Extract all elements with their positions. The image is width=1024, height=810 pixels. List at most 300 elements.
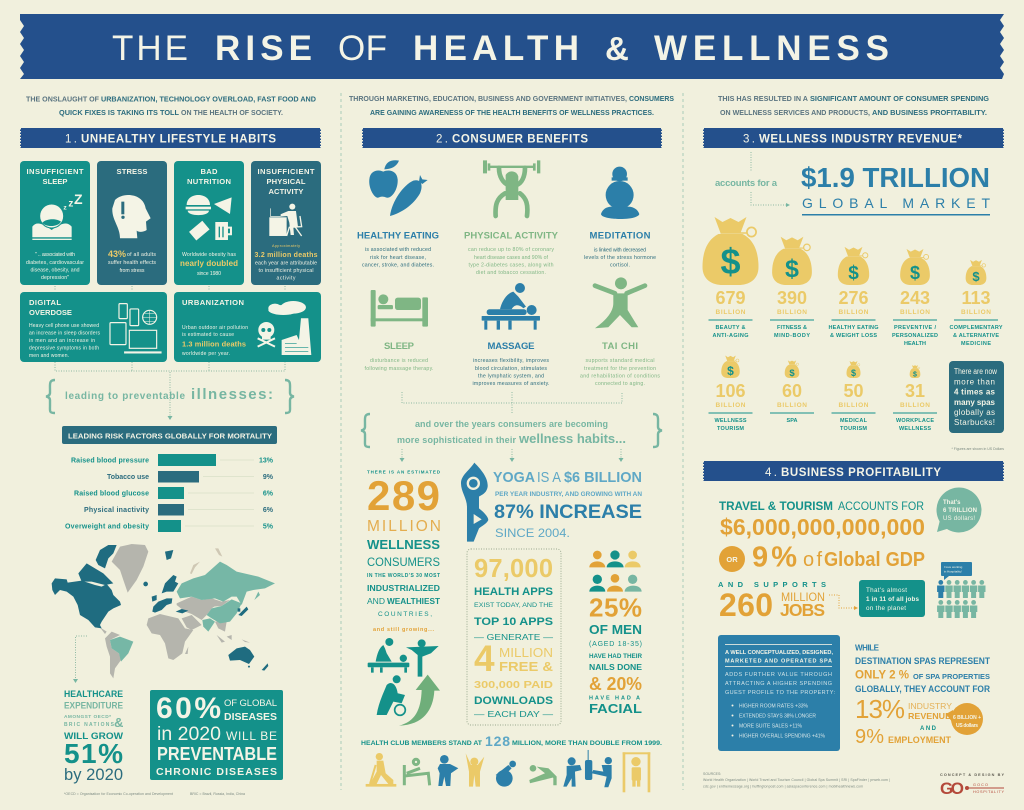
title banner: & — [605, 30, 629, 67]
footnote: OECD and BRIC: *OECD = Organisation for Economic Co-operation and Development — [64, 792, 173, 796]
card: stress — [97, 161, 167, 285]
card: digital overdose: depressive symptoms in both — [29, 346, 99, 352]
block: destination spas: AND — [920, 726, 937, 732]
revenue item: medical tourism — [832, 361, 876, 432]
intro: column 1: ON THE HEALTH OF SOCIETY. — [181, 108, 283, 117]
intro: column 3: AND BUSINESS PROFITABILITY. — [872, 108, 987, 117]
benefit: massage: increases flexibility, improves — [473, 358, 549, 364]
benefit: tai chi: and rehabilitation of conditions — [580, 374, 660, 380]
block: yoga: SINCE 2004. — [495, 526, 570, 540]
health club members line: MILLION, MORE THAN DOUBLE FROM 1999. — [512, 740, 662, 747]
healthcare expenditure text: AMONGST OECD* — [64, 714, 111, 720]
revenue item: complementary and alternative medicine: & ALTERNATIVE — [953, 333, 999, 339]
block: 260 million jobs: JOBS — [780, 600, 825, 620]
revenue item: complementary and alternative medicine: MEDICINE — [961, 341, 991, 347]
health club members line — [361, 733, 662, 749]
icon: sleeping head on book — [32, 191, 83, 240]
benefit: massage — [472, 283, 550, 387]
card: bad nutrition: Worldwide obesity has — [182, 252, 236, 258]
section heading 3: 3. — [743, 134, 755, 146]
world map — [52, 544, 275, 678]
revenue item: beauty and anti-aging: ANTI-AGING — [712, 333, 748, 339]
card: insufficient physical activity: ACTIVITY — [268, 187, 304, 196]
icons: gym exercise row — [366, 750, 650, 792]
block: yoga: PER YEAR INDUSTRY, AND GROWING WITH AN — [495, 492, 642, 498]
panel: well conceptualized spa: A WELL CONCEPTUALIZED, DESIGNED, — [725, 650, 833, 656]
revenue item: preventive and personalized health — [892, 249, 938, 347]
arrow: map to healthcare text — [73, 636, 87, 683]
logo: GOCO Hospitality: CONCEPT & DESIGN BY — [940, 773, 1004, 777]
benefit: tai chi: TAI CHI — [602, 341, 638, 352]
block: health apps: — GENERATE — — [474, 633, 553, 642]
block: men grooming stats — [589, 593, 643, 716]
sources — [703, 772, 890, 788]
icon: phones, tablet, laptop, globe — [110, 304, 161, 353]
block: 289 million consumers: WELLNESS — [367, 537, 440, 552]
icon: sleeping head on book: z — [68, 199, 73, 210]
revenue item: workplace wellness: $ — [913, 372, 917, 378]
benefit: physical activity: type 2-diabetes cases, along with — [468, 262, 554, 268]
revenue item: medical tourism: 50 — [843, 381, 864, 401]
revenue item: spa: $ — [789, 368, 795, 379]
benefit: sleep: following massage therapy. — [364, 366, 434, 372]
panel: well conceptualized spa: HIGHER OVERALL SPENDING +41% — [739, 734, 826, 740]
revenue item: wellness tourism: 106 — [715, 381, 746, 401]
card: digital overdose: OVERDOSE — [29, 308, 72, 317]
revenue item: fitness and mind-body — [770, 237, 814, 339]
card: insufficient physical activity: activity — [276, 276, 296, 282]
health club members line: 128 — [485, 733, 510, 749]
revenue item: beauty and anti-aging — [702, 217, 758, 339]
block: 260 million jobs — [718, 580, 826, 623]
heading: leading risk factors: LEADING RISK FACTORS GLOBALLY FOR MORTALITY — [68, 432, 272, 440]
badge: 6 billion: 6 BILLION + — [953, 715, 981, 721]
block: health apps: MILLION — [499, 645, 553, 660]
revenue item: medical tourism: MEDICAL — [840, 418, 868, 424]
heading: wellness habits: wellness habits... — [518, 431, 626, 446]
block: men grooming stats: HAVE HAD THEIR — [589, 654, 643, 660]
card: stress: suffer health effects — [108, 260, 156, 266]
panel: well conceptualized spa: GUEST PROFILE TO THE PROPERTY: — [725, 690, 835, 696]
heading: wellness habits — [397, 419, 626, 446]
card: urbanization: URBANIZATION — [182, 298, 244, 307]
block: destination spas: GLOBALLY, THEY ACCOUNT FOR — [855, 684, 990, 694]
sources: SOURCES: — [703, 772, 721, 776]
benefit: tai chi: treatment for the prevention — [584, 366, 656, 372]
panel: well conceptualized spa: HIGHER ROOM RATES +33% — [739, 704, 809, 710]
section heading 2: 2. — [436, 134, 448, 146]
panel: well conceptualized spa: ADDS FURTHER VALUE THROUGH — [725, 672, 832, 678]
section heading 2: CONSUMER BENEFITS — [452, 134, 588, 146]
revenue item: spa — [770, 360, 814, 424]
right brace — [653, 414, 662, 447]
intro: column 3 — [718, 94, 989, 117]
card: insufficient physical activity: each year are attributable — [255, 260, 317, 266]
benefit: healthy eating: HEALTHY EATING — [357, 231, 439, 242]
badge: or — [719, 546, 745, 572]
block: yoga: YOGA — [493, 469, 535, 486]
intro: column 2 — [349, 94, 674, 117]
badge: 6 billion — [946, 703, 983, 735]
icon: massage table — [482, 283, 540, 330]
title banner: WELLNESS — [654, 29, 889, 68]
icons: massage, stretch, exercise bike, growth arrow — [368, 638, 440, 726]
callout: 60% of global diseases: PREVENTABLE — [157, 744, 277, 764]
healthcare expenditure text: BRIC NATIONS — [64, 722, 115, 728]
block: men grooming stats: NAILS DONE — [589, 663, 643, 672]
block: travel and tourism: ACCOUNTS FOR — [838, 499, 924, 513]
block: health apps: TOP 10 APPS — [474, 616, 553, 628]
benefit: sleep — [364, 290, 434, 372]
card: insufficient physical activity: 3.2 million deaths — [254, 252, 318, 259]
revenue item: preventive and personalized health: BILLION — [900, 309, 930, 316]
block: men grooming stats: 25% — [589, 593, 642, 623]
footnote: OECD and BRIC — [64, 792, 245, 796]
badge: or: OR — [726, 555, 738, 564]
logo: GOCO Hospitality — [940, 773, 1004, 798]
bar chart: risk factors: Raised blood pressure — [71, 458, 149, 464]
block: health apps: 300,000 PAID — [474, 679, 553, 691]
arrows: habits down to blocks — [400, 449, 624, 462]
card: insufficient physical activity: INSUFFICIENT — [258, 167, 315, 176]
block: travel and tourism: Global GDP — [824, 549, 925, 571]
icon: apple and carrot — [369, 160, 428, 216]
badge: 6 billion: US dollars — [956, 723, 978, 729]
intro: column 1: QUICK FIXES IS TAKING ITS TOLL — [59, 108, 179, 117]
panel: well conceptualized spa: EXTENDED STAYS 38% LONGER — [739, 714, 816, 720]
card: insufficient sleep: depression" — [41, 275, 69, 281]
title banner — [20, 14, 1004, 79]
benefit: tai chi: connected to aging. — [595, 381, 645, 387]
speech bubble: 6 trillion: US dollars! — [943, 516, 975, 522]
heading: leading to preventable illnesses: leading to preventable — [65, 391, 185, 402]
block: men grooming stats: OF MEN — [589, 622, 642, 637]
card: insufficient physical activity: Approximately — [272, 244, 300, 248]
benefit: physical activity: heart disease cases and 90% of — [474, 255, 549, 261]
bar chart: risk factors: Overweight and obesity — [65, 524, 149, 530]
card: insufficient physical activity: to insufficient physical — [258, 268, 314, 274]
block: travel and tourism: TRAVEL & TOURISM — [719, 499, 833, 513]
icons: six men — [589, 550, 642, 592]
benefit: meditation: MEDITATION — [590, 231, 651, 242]
block: destination spas: EMPLOYMENT — [888, 735, 951, 745]
block: destination spas — [855, 644, 990, 748]
speech bubble: 6 trillion: 6 TRILLION — [943, 508, 977, 514]
revenue item: healthy eating and weight loss: & WEIGHT LOSS — [830, 333, 877, 339]
revenue item: complementary and alternative medicine: COMPLEMENTARY — [950, 325, 1003, 331]
healthcare expenditure text: & — [114, 715, 123, 730]
block: men grooming stats: (AGED 18-35) — [589, 641, 642, 648]
callout: 1 in 11 jobs: That's almost — [866, 587, 907, 594]
block: destination spas: ONLY 2 % — [855, 670, 909, 682]
block: yoga: IS A — [537, 469, 561, 486]
revenue item: medical tourism: TOURISM — [840, 426, 867, 432]
callout: spas vs Starbucks: globally as — [954, 408, 995, 417]
intro: column 3: SIGNIFICANT AMOUNT OF CONSUMER SPENDING — [810, 94, 989, 103]
revenue item: preventive and personalized health: 243 — [900, 288, 930, 308]
block: destination spas: DESTINATION SPAS REPRESENT — [855, 656, 990, 666]
intro: column 1: THE ONSLAUGHT OF — [26, 94, 99, 104]
benefit: healthy eating: is associated with reduced — [365, 247, 431, 253]
icon: head with exclamation — [112, 195, 151, 238]
block: 289 million consumers: CONSUMERS — [367, 555, 440, 569]
revenue item: complementary and alternative medicine: $ — [972, 269, 980, 284]
revenue item: healthy eating and weight loss — [828, 247, 878, 339]
callout: spas vs Starbucks — [949, 361, 1004, 433]
icon: person sitting at desk — [269, 204, 302, 236]
icon: workers group with speech bubble — [937, 562, 986, 618]
bar chart: risk factors: 9% — [263, 474, 274, 481]
headline: 1.9 trillion global market: GLOBAL MARKET — [802, 195, 990, 211]
callout: 60% of global diseases: WILL BE — [226, 729, 277, 743]
block: 289 million consumers: COUNTRIES, — [378, 611, 432, 618]
footnote: OECD and BRIC: BRIC = Brazil, Russia, India, China — [190, 792, 245, 796]
callout: 60% of global diseases — [150, 690, 283, 780]
logo: GOCO Hospitality: GO — [940, 779, 964, 798]
card: urbanization: worldwide per year. — [182, 351, 230, 357]
revenue item: workplace wellness: BILLION — [900, 402, 930, 409]
section heading 2 — [362, 128, 662, 148]
revenue item: fitness and mind-body: 390 — [777, 288, 807, 308]
revenue item: complementary and alternative medicine: BILLION — [961, 309, 991, 316]
bar chart: risk factors: Raised blood glucose — [74, 490, 149, 498]
heading: wellness habits: and over the years consumers are becoming — [415, 419, 608, 429]
block: 289 million consumers: 289 — [367, 472, 440, 519]
callout: spas vs Starbucks: more than — [954, 378, 995, 386]
block: yoga: 87% INCREASE — [494, 501, 642, 523]
revenue item: spa: SPA — [787, 418, 797, 424]
heading: wellness habits: more sophisticated in their — [397, 435, 516, 445]
callout: 1 in 11 jobs — [859, 580, 925, 617]
icon: sleeping head on book: Z — [74, 191, 83, 207]
revenue item: workplace wellness: WELLNESS — [899, 426, 931, 432]
healthcare expenditure text — [64, 689, 123, 784]
card: digital overdose: Heavy cell phone use showed — [29, 323, 99, 329]
benefit: physical activity — [464, 160, 559, 276]
logo: GOCO Hospitality: HOSPITALITY — [973, 790, 1004, 794]
panel: well conceptualized spa: ATTRACTING A HIGHER SPENDING — [725, 681, 832, 687]
section heading 4 — [703, 461, 1004, 481]
bar chart: risk factors — [65, 454, 274, 532]
icon: meditating figure — [601, 167, 639, 219]
revenue item: fitness and mind-body: MIND-BODY — [774, 333, 810, 339]
card: insufficient physical activity — [251, 161, 321, 285]
panel: well conceptualized spa: MARKETED AND OPERATED SPA — [725, 658, 832, 664]
block: destination spas: OF SPA PROPERTIES — [913, 672, 990, 681]
icon: workers group with speech bubble: I love working — [944, 565, 963, 569]
revenue item: wellness tourism: $ — [727, 364, 734, 378]
card: insufficient sleep: disease, obesity, and — [30, 268, 80, 274]
card: insufficient sleep: INSUFFICIENT — [26, 167, 84, 176]
card: bad nutrition: since 1980 — [197, 271, 221, 277]
benefit: meditation — [584, 167, 656, 268]
section heading 3 — [703, 128, 1004, 148]
bar chart: risk factors: 5% — [263, 524, 274, 530]
title banner: RISE — [215, 29, 312, 68]
block: 260 million jobs: AND SUPPORTS — [718, 580, 826, 589]
bar chart: risk factors: Physical inactivity — [84, 507, 149, 514]
speech bubble: 6 trillion: That's — [943, 500, 961, 506]
card: stress: from stress — [120, 268, 145, 274]
card: digital overdose: an increase in sleep disorders — [29, 330, 100, 336]
card: urbanization: is estimated to cause — [182, 332, 234, 338]
intro: column 2: ARE GAINING AWARENESS OF THE HEALTH BENEFITS OF WELLNESS PRACTICES. — [370, 108, 654, 117]
left brace — [361, 414, 370, 447]
card: urbanization: 1.3 million deaths — [182, 340, 246, 348]
panel: well conceptualized spa: MORE SUITE SALES +11% — [739, 724, 803, 730]
logo: GOCO Hospitality: GOCO — [973, 783, 988, 787]
block: health apps: — EACH DAY — — [474, 710, 553, 719]
block: yoga: $6 BILLION — [564, 469, 642, 486]
benefit: massage: blood circulation, stimulates — [475, 366, 547, 372]
benefit: healthy eating — [357, 160, 439, 268]
callout: 60% of global diseases: in 2020 — [157, 723, 221, 745]
heading: leading risk factors — [62, 426, 277, 444]
benefit: sleep: disturbance is reduced — [370, 358, 428, 364]
revenue item: beauty and anti-aging: BILLION — [716, 309, 746, 316]
benefit: physical activity: can reduce up to 80% of coronary — [468, 247, 554, 253]
card: urbanization: Urban outdoor air pollution — [182, 325, 248, 331]
revenue item: beauty and anti-aging: $ — [720, 241, 741, 282]
revenue item: complementary and alternative medicine: 113 — [961, 288, 991, 308]
block: travel and tourism: $6,000,000,000,000 — [720, 514, 925, 540]
benefit: healthy eating: cancer, stroke, and diabetes. — [362, 262, 434, 268]
card: stress: 43% — [108, 249, 126, 259]
connector: benefits to habits — [402, 392, 622, 414]
revenue item: healthy eating and weight loss: BILLION — [838, 309, 869, 316]
block: destination spas: INDUSTRY — [908, 701, 952, 711]
revenue item: spa: 60 — [782, 381, 802, 401]
headline: 1.9 trillion global market: $1.9 TRILLION — [801, 162, 990, 193]
bar chart: risk factors: Tobacco use — [107, 474, 149, 481]
block: 260 million jobs: MILLION — [781, 592, 825, 604]
block: men grooming stats: FACIAL — [589, 701, 642, 716]
icon: tai chi figure — [595, 277, 645, 328]
revenue item: wellness tourism: BILLION — [716, 402, 746, 409]
revenue item: healthy eating and weight loss: HEALTHY EATING — [828, 325, 878, 331]
revenue item: workplace wellness — [893, 365, 937, 432]
connector: cards to illnesses — [55, 286, 285, 420]
heading: leading to preventable illnesses: illnesses: — [191, 386, 273, 403]
revenue item: healthy eating and weight loss: 276 — [838, 288, 869, 308]
card: insufficient sleep: " .. associated with — [35, 252, 75, 258]
section heading 1: UNHEALTHY LIFESTYLE HABITS — [81, 134, 276, 146]
benefit: tai chi — [580, 277, 660, 387]
block: men grooming stats: & 20% — [589, 674, 642, 694]
speech bubble: 6 trillion — [936, 488, 982, 532]
revenue item: fitness and mind-body: BILLION — [777, 309, 807, 316]
revenue item: complementary and alternative medicine — [950, 260, 1003, 347]
icon: person in bed — [371, 290, 428, 327]
block: 289 million consumers: THERE IS AN ESTIMATED — [367, 470, 441, 475]
callout: spas vs Starbucks: 4 times as — [954, 388, 996, 396]
health club members line: HEALTH CLUB MEMBERS STAND AT — [361, 740, 482, 747]
section heading 3: WELLNESS INDUSTRY REVENUE* — [759, 134, 963, 146]
right brace — [285, 380, 294, 413]
intro: column 2: CONSUMERS — [629, 94, 674, 103]
revenue item: preventive and personalized health: $ — [910, 263, 920, 283]
card: bad nutrition — [174, 161, 244, 285]
healthcare expenditure text: by 2020 — [64, 766, 123, 784]
section heading 4: BUSINESS PROFITABILITY — [781, 467, 941, 479]
block: 289 million consumers: IN THE WORLD'S 30 MOST — [367, 573, 440, 579]
callout: 1 in 11 jobs: 1 in 11 of all jobs — [866, 596, 919, 603]
revenue item: fitness and mind-body: FITNESS & — [777, 325, 807, 331]
benefit: physical activity: PHYSICAL ACTIVITY — [464, 231, 559, 242]
benefit: massage: the lymphatic system, and — [478, 374, 544, 380]
block: health apps: 97,000 — [474, 555, 553, 583]
title banner: HEALTH — [413, 29, 579, 68]
intro: column 1 — [26, 94, 317, 117]
benefit: massage: MASSAGE — [488, 341, 534, 352]
icon: weightlifter — [483, 160, 540, 216]
section heading 4: 4. — [765, 467, 777, 479]
revenue item: preventive and personalized health: PREVENTIVE / — [894, 325, 936, 331]
revenue item: wellness tourism: WELLNESS — [714, 418, 747, 424]
callout: 1 in 11 jobs: on the planet — [866, 605, 906, 612]
icon: burger, pizza, chocolate, beer — [186, 195, 232, 241]
revenue item: workplace wellness: 31 — [905, 381, 925, 401]
revenue item: preventive and personalized health: PERSONALIZED — [892, 333, 938, 339]
block: destination spas: 13% — [855, 694, 905, 724]
card: digital overdose: men and women. — [29, 353, 69, 359]
accounts for arrow: accounts for a — [715, 178, 778, 189]
card: bad nutrition: NUTRITION — [187, 177, 231, 186]
card: digital overdose — [20, 292, 167, 362]
revenue item: beauty and anti-aging: 679 — [715, 288, 746, 308]
benefit: sleep: SLEEP — [384, 341, 415, 352]
card: insufficient sleep: SLEEP — [42, 177, 68, 186]
block: health apps: HEALTH APPS — [474, 586, 553, 598]
block: travel and tourism: of — [803, 549, 822, 571]
callout: 60% of global diseases: 60% — [156, 692, 221, 725]
revenue item: medical tourism: $ — [851, 368, 856, 378]
card: stress: STRESS — [116, 167, 148, 176]
block: 289 million consumers: MILLION — [367, 518, 441, 535]
intro: column 1: URBANIZATION, TECHNOLOGY OVERLOAD, FAST FOOD AND — [101, 94, 317, 104]
benefit: meditation: is linked with decreased — [594, 248, 646, 254]
block: 289 million consumers: WEALTHIEST — [387, 597, 440, 606]
revenue item: wellness tourism — [708, 356, 752, 432]
revenue item: beauty and anti-aging: BEAUTY & — [716, 325, 746, 331]
block: 260 million jobs: 260 — [719, 587, 773, 623]
icon: skull, factory, smoke cloud — [258, 301, 311, 355]
card: digital overdose: DIGITAL — [29, 298, 61, 307]
card: insufficient sleep: diabetes, cardiovascular — [26, 260, 84, 266]
sources: World Health Organization | World Travel and Tourism Council | Global Spa Summit | SRI | SpaFinder | prweb.com | — [703, 778, 890, 782]
sources: cdc.gov | enthemessage.org | huffingtonpost.com | asiaspaconference.com | mobihealthnews.com — [703, 784, 863, 788]
left brace — [46, 380, 55, 413]
benefit: physical activity: diet and tobacco cessation. — [476, 270, 546, 276]
revenue item: fitness and mind-body: $ — [785, 255, 799, 283]
arrow: jobs to callout — [829, 595, 858, 610]
revenue item: medical tourism: BILLION — [838, 402, 869, 409]
block: travel and tourism — [719, 499, 925, 574]
block: health apps — [467, 549, 561, 725]
panel: well conceptualized spa — [718, 635, 840, 751]
callout: spas vs Starbucks: many spas — [954, 398, 996, 407]
block: travel and tourism: 9% — [752, 542, 797, 574]
healthcare expenditure text: 51% — [64, 738, 123, 769]
callout: 60% of global diseases: CHRONIC DISEASES — [156, 766, 277, 778]
callout: 60% of global diseases: OF GLOBAL — [224, 698, 277, 709]
benefit: tai chi: supports standard medical — [586, 358, 654, 364]
benefit: healthy eating: risk for heart disease, — [370, 255, 426, 261]
block: health apps: EXIST TODAY, AND THE — [474, 602, 554, 609]
benefit: meditation: levels of the stress hormone — [584, 255, 656, 261]
card: digital overdose: in men and an increase in — [29, 338, 95, 344]
callout: spas vs Starbucks: Starbucks! — [954, 418, 995, 427]
